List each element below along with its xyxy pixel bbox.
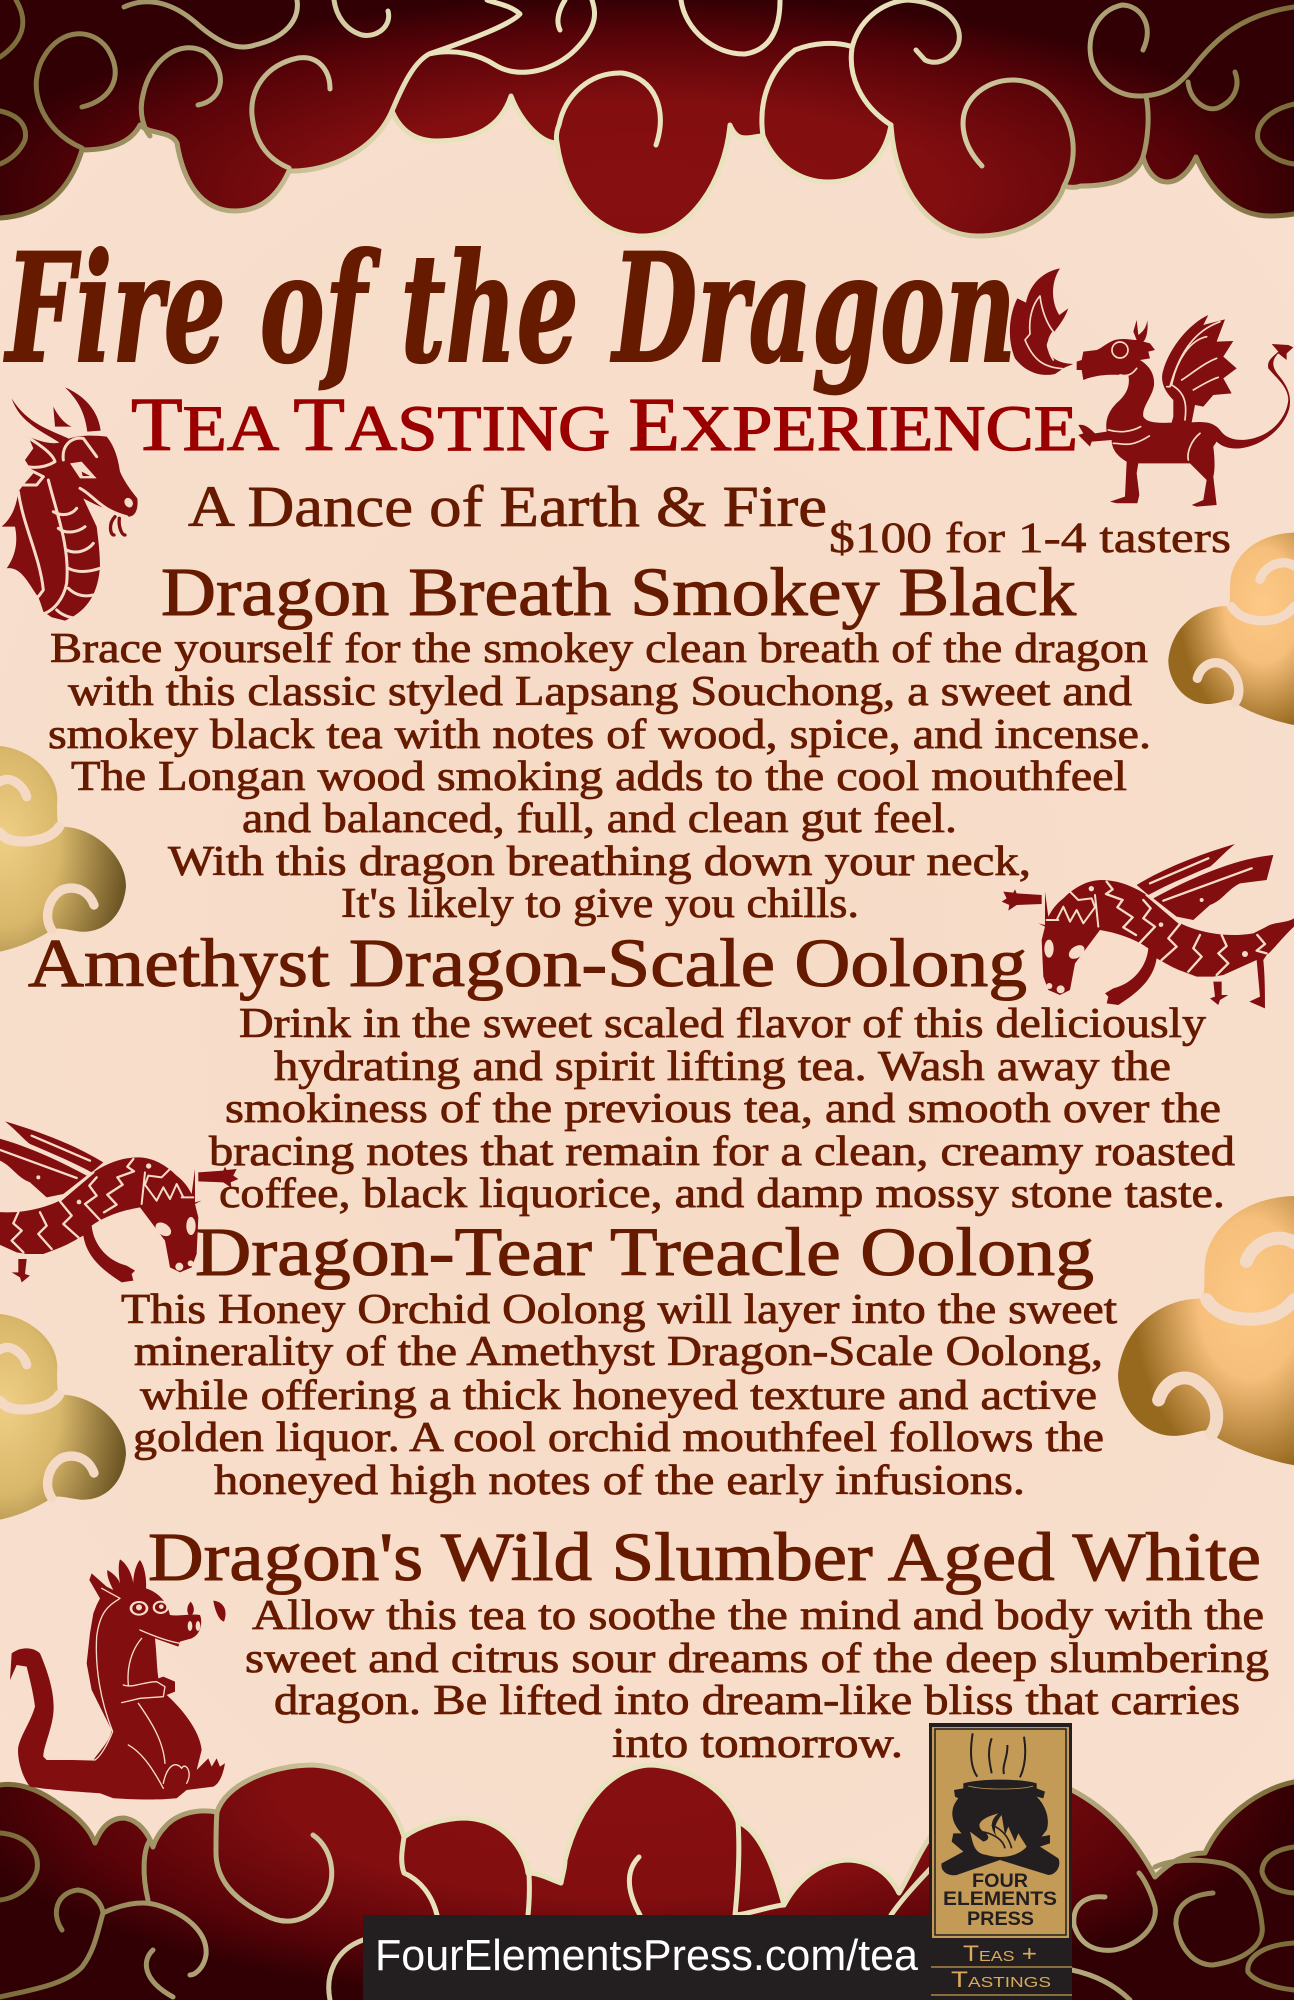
tea 1 description: Brace yourself for the smokey clean breath of the dragon: [50, 626, 1148, 672]
dragon: head, left: [2, 387, 138, 621]
tagline: A Dance of Earth & Fire: [188, 474, 827, 539]
tea 3 heading: Dragon-Tear Treacle Oolong: [195, 1214, 1094, 1290]
tea 4 description: into tomorrow.: [612, 1721, 903, 1767]
tea 3 description: This Honey Orchid Oolong will layer into the sweet: [121, 1287, 1117, 1333]
tea 2 description: smokiness of the previous tea, and smooth over the: [225, 1086, 1221, 1132]
gold cloud: upper right: [1168, 533, 1294, 725]
logo: Four Elements Press: [929, 1723, 1072, 2000]
price: $100 for 1-4 tasters: [829, 515, 1231, 562]
dragon: fire breathing, top right: [1010, 268, 1293, 507]
tea 4 description: [245, 1593, 1269, 1767]
tea 1 description: With this dragon breathing down your neck,: [168, 839, 1031, 885]
gold cloud: lower left: [0, 1314, 126, 1520]
dragon: sitting, bottom left: [10, 1559, 226, 1800]
tea 2 description: hydrating and spirit lifting tea. Wash away the: [274, 1044, 1171, 1090]
tea 2 description: bracing notes that remain for a clean, creamy roasted: [209, 1129, 1235, 1175]
tea 3 description: honeyed high notes of the early infusions.: [214, 1458, 1025, 1504]
logo: Four Elements Press: Tastings: [951, 1967, 1051, 1992]
subtitle: TEA TASTING EXPERIENCE: [131, 383, 1078, 467]
tea 2 heading: Amethyst Dragon-Scale Oolong: [28, 925, 1027, 1001]
tea 1 description: [48, 626, 1151, 927]
logo: Four Elements Press: Teas +: [963, 1941, 1037, 1966]
tea 3 description: [121, 1287, 1117, 1504]
tea 4 heading: Dragon's Wild Slumber Aged White: [148, 1519, 1261, 1595]
logo: Four Elements Press: PRESS: [967, 1909, 1034, 1930]
dragon: flying, left: [0, 1121, 238, 1286]
tea 1 description: with this classic styled Lapsang Souchong, a sweet and: [68, 669, 1132, 715]
gold cloud: lower right: [1118, 1196, 1294, 1465]
dragon: flying, right: [1002, 844, 1294, 1008]
bottom cloud border: [0, 1765, 1294, 2000]
logo: Four Elements Press: ELEMENTS: [943, 1889, 1057, 1910]
tea 4 description: dragon. Be lifted into dream-like bliss that carries: [274, 1678, 1240, 1724]
logo: Four Elements Press: FOUR: [972, 1871, 1028, 1892]
gold cloud: upper left: [0, 746, 126, 952]
tea 3 description: while offering a thick honeyed texture and active: [140, 1373, 1097, 1419]
tea 1 description: and balanced, full, and clean gut feel.: [242, 796, 957, 842]
tea 4 description: sweet and citrus sour dreams of the deep slumbering: [245, 1636, 1269, 1682]
website banner: FourElementsPress.com/tea: [375, 1931, 919, 1980]
tea 3 description: minerality of the Amethyst Dragon-Scale Oolong,: [134, 1329, 1103, 1375]
tea 4 description: Allow this tea to soothe the mind and body with the: [252, 1593, 1264, 1639]
tea 1 description: The Longan wood smoking adds to the cool mouthfeel: [71, 754, 1127, 800]
tea 3 description: golden liquor. A cool orchid mouthfeel follows the: [133, 1415, 1104, 1461]
tea 2 description: [209, 1001, 1235, 1217]
tea 1 description: It's likely to give you chills.: [341, 881, 859, 927]
tea 1 description: smokey black tea with notes of wood, spice, and incense.: [48, 712, 1151, 758]
tea 2 description: coffee, black liquorice, and damp mossy stone taste.: [219, 1171, 1225, 1217]
top cloud border: [0, 0, 1294, 236]
tea 2 description: Drink in the sweet scaled flavor of this deliciously: [239, 1001, 1206, 1047]
website banner: [363, 1915, 933, 2000]
tea 1 heading: Dragon Breath Smokey Black: [161, 554, 1077, 630]
